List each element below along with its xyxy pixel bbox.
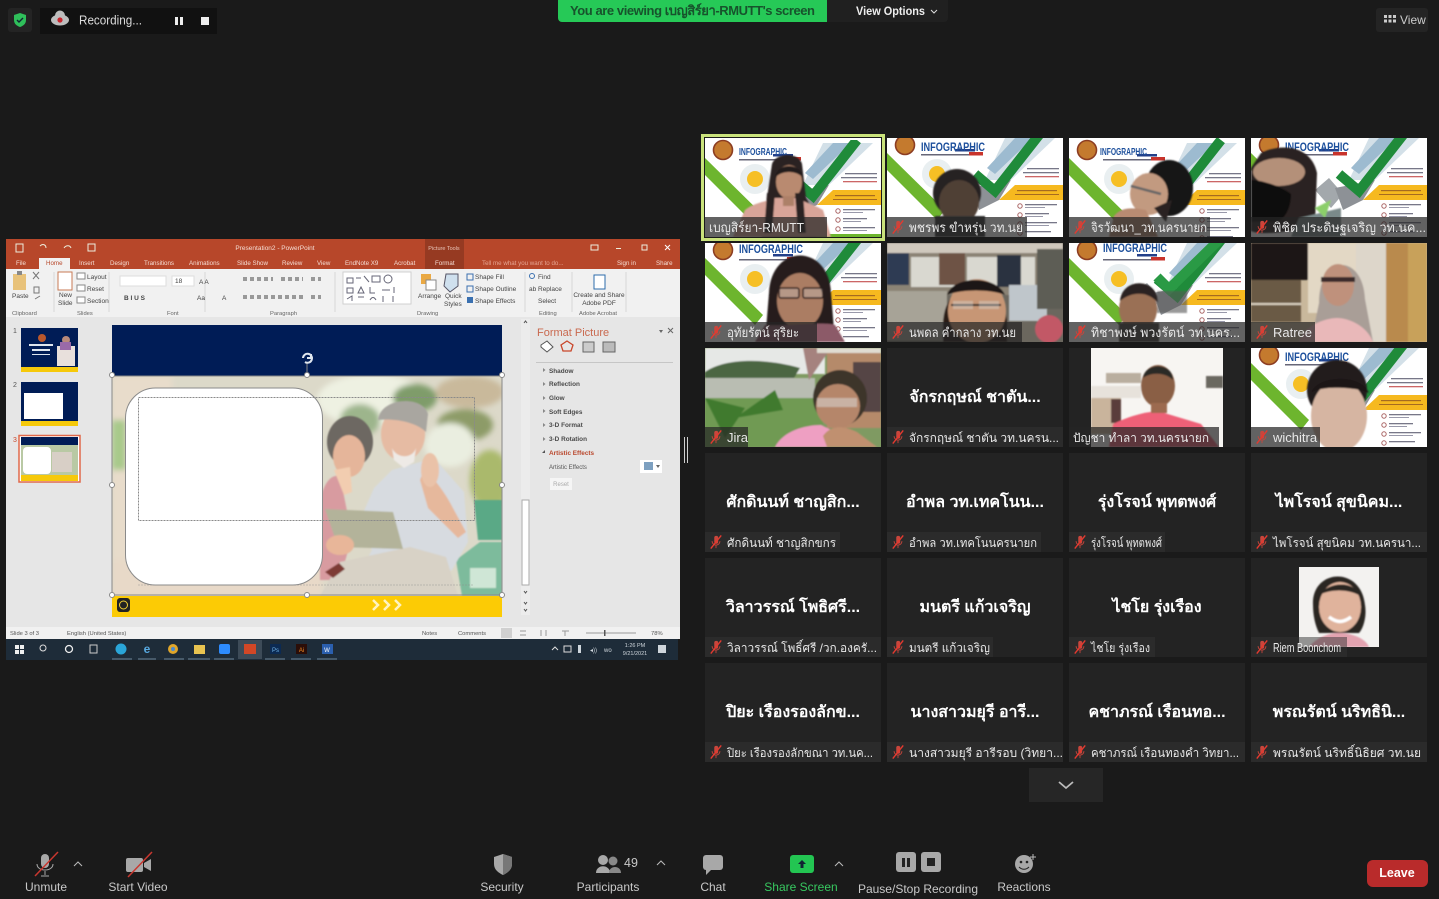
slide thumbnails: 3 — [13, 437, 17, 444]
ribbon: Shape Effects — [475, 298, 516, 305]
participant name labels: อุทัยรัตน์ สุริยะ — [727, 325, 799, 341]
participant tile: อุทัยรัตน์: INFOGRAPHIC — [739, 242, 803, 256]
name bar backgrounds — [705, 217, 1427, 762]
slide thumbnails: 2 — [13, 382, 17, 389]
participant tile: พชรพร — [887, 138, 1063, 237]
large participant names: ปิยะ เรืองรองลักข... — [725, 703, 860, 721]
PowerPoint title bar and tabs: Format — [435, 260, 455, 267]
windows taskbar: 1:26 PM — [625, 643, 646, 649]
large participant names: ศักดินนท์ ชาญสิก... — [726, 492, 860, 512]
participant name labels: ปิยะ เรืองรองลักขณา วท.นค... — [726, 746, 873, 760]
format picture pane: Reflection — [549, 381, 580, 388]
status bar: Comments — [458, 631, 486, 637]
format picture pane: 3-D Format — [549, 422, 584, 429]
shared PowerPoint window — [6, 239, 680, 660]
ribbon: Layout — [87, 274, 107, 281]
chat control: Chat — [700, 880, 726, 894]
selection handles — [110, 362, 504, 598]
participant name labels: จักรกฤษณ์ ชาตัน วท.นครน... — [909, 431, 1059, 445]
editing area background — [6, 317, 680, 627]
participants control: 49 — [624, 856, 638, 870]
PowerPoint title bar and tabs — [6, 239, 680, 269]
participant name labels: พรณรัตน์ นริทธิ์นิธิยศ วท.นย — [1273, 744, 1421, 760]
ribbon: Clipboard — [12, 311, 37, 317]
large participant names: มนตรี แก้วเจริญ — [920, 597, 1030, 617]
participant name labels: นางสาวมยุรี อารีรอบ (วิทยา... — [909, 746, 1063, 761]
security control — [480, 854, 524, 894]
participant tile: ทิชาพงษ์: INFOGRAPHIC — [1103, 241, 1167, 255]
participants control: Participants — [577, 880, 639, 894]
ribbon: Quick — [445, 293, 462, 300]
pause stop recording control — [858, 852, 978, 896]
ribbon: A A — [199, 279, 209, 286]
leave button: Leave — [1379, 866, 1415, 880]
ribbon: Font — [167, 311, 179, 317]
participant name labels: รุ่งโรจน์ พุทตพงศ์ — [1091, 536, 1162, 551]
PowerPoint title bar and tabs: Share — [656, 260, 673, 267]
ribbon: 18 — [175, 278, 183, 285]
vertical scroll bar — [521, 319, 530, 615]
participants control — [577, 855, 665, 894]
start video control — [108, 852, 168, 894]
large participant names: ไพโรจน์ สุขนิคม... — [1274, 491, 1402, 512]
unmute control: Unmute — [25, 880, 67, 894]
PowerPoint title bar and tabs: Transitions — [144, 260, 174, 267]
slide — [110, 325, 510, 617]
participant name labels: พชรพร ขำหรุ่น วท.นย — [909, 220, 1023, 236]
participant tile: Ratree — [1251, 243, 1427, 342]
format picture pane: Reset — [553, 482, 569, 488]
participant tile: นพดล — [887, 243, 1063, 342]
dashed text placeholder — [138, 398, 474, 585]
bottom toolbar — [25, 852, 1428, 896]
PowerPoint title bar and tabs: Review — [282, 260, 303, 267]
participant name labels: จิรวัฒนา_วท.นครนายก — [1091, 220, 1207, 235]
participant name labels: Ratree — [1273, 325, 1312, 340]
view button: View — [1400, 13, 1426, 27]
status bar: English (United States) — [67, 631, 126, 637]
ribbon: Shape Outline — [475, 286, 517, 293]
PowerPoint title bar and tabs: Tell me what you want to do... — [482, 260, 564, 267]
participant tile: speaker: INFOGRAPHIC — [739, 147, 787, 158]
rotate handle — [303, 354, 312, 363]
PowerPoint title bar and tabs: Picture Tools — [428, 246, 460, 252]
large participant names: คชาภรณ์ เรือนทอ... — [1088, 702, 1226, 721]
leave button — [1367, 860, 1428, 887]
ribbon: Adobe Acrobat — [579, 311, 617, 317]
screen share banner — [558, 0, 827, 22]
security control: Security — [480, 880, 524, 894]
ribbon: Aa — [197, 295, 205, 302]
reactions control — [997, 854, 1051, 894]
PowerPoint title bar and tabs: Animations — [189, 260, 220, 267]
large participant names — [725, 387, 1405, 722]
muted microphone icons — [711, 220, 1267, 759]
pause stop recording control: Pause/Stop Recording — [858, 882, 978, 896]
ribbon: Arrange — [418, 293, 442, 300]
ribbon: ab — [529, 286, 537, 293]
recording indicator: Recording... — [79, 12, 142, 28]
participant tile: speaker — [705, 138, 881, 237]
participant name labels: wichitra — [1272, 430, 1318, 445]
participant tile: พิชิต — [1251, 138, 1427, 237]
PowerPoint title bar and tabs: Design — [110, 260, 130, 267]
format picture pane: Soft Edges — [549, 409, 583, 416]
status bar — [6, 627, 680, 639]
ribbon: B I U S — [124, 295, 146, 302]
PowerPoint title bar and tabs: Sign in — [617, 260, 636, 267]
PowerPoint title bar and tabs: File — [16, 260, 27, 267]
participant tile: wichitra: INFOGRAPHIC — [1285, 350, 1349, 364]
ribbon: Adobe PDF — [582, 300, 616, 307]
participant name labels: ศักดินนท์ ชาญสิกขกร — [727, 536, 837, 550]
PowerPoint title bar and tabs: View — [317, 260, 331, 267]
ribbon: Editing — [539, 311, 557, 317]
slide thumbnails: 1 — [13, 328, 17, 335]
format picture pane: Artistic Effects — [549, 465, 587, 471]
ribbon: Section — [87, 298, 109, 305]
participant name labels: วิลาวรรณ์ โพธิ์ศรี /วก.องครั... — [727, 639, 877, 655]
participant tile: พชรพร: INFOGRAPHIC — [921, 140, 985, 154]
PowerPoint title bar and tabs: Insert — [79, 260, 95, 267]
ribbon: Reset — [87, 286, 104, 293]
status bar: Notes — [422, 631, 437, 637]
participant name labels: Riem Boonchom — [1273, 640, 1341, 655]
view options dropdown — [827, 0, 948, 22]
share screen control: Share Screen — [764, 880, 838, 894]
format picture pane: 3-D Rotation — [549, 436, 587, 443]
status bar: 78% — [651, 631, 663, 637]
participant name labels: พิชิต ประดิษฐเจริญ วท.นค... — [1273, 220, 1426, 236]
participant name labels: อำพล วท.เทคโนนครนายก — [909, 536, 1037, 550]
ribbon — [6, 269, 680, 317]
format picture pane: Format Picture — [537, 327, 609, 339]
PowerPoint title bar and tabs: Presentation2 - PowerPoint — [235, 245, 315, 252]
participant name labels: ไชโย รุ่งเรือง — [1090, 641, 1150, 656]
PowerPoint title bar and tabs: Slide Show — [237, 260, 268, 267]
participant tile: ทิชาพงษ์ — [1069, 241, 1245, 342]
slide navy header — [112, 325, 502, 376]
security shield badge — [8, 8, 32, 32]
participant name labels: ปัญชา ทำลา วท.นครนายก — [1073, 431, 1209, 445]
ribbon: Replace — [538, 286, 562, 293]
view options dropdown: View Options — [856, 4, 925, 18]
active speaker highlight — [702, 136, 884, 240]
avatar-off tile backgrounds — [705, 348, 1427, 762]
participant tile: wichitra — [1251, 348, 1427, 447]
ribbon: Slides — [77, 311, 93, 317]
windows taskbar: Ps — [272, 648, 279, 654]
chat control — [700, 855, 726, 894]
participant name labels: คชาภรณ์ เรือนทองคำ วิทยา... — [1091, 746, 1239, 760]
white rounded content box — [126, 388, 322, 585]
ribbon: A — [222, 295, 227, 302]
participant name labels: ทิชาพงษ์ พวงรัตน์ วท.นคร... — [1091, 325, 1240, 340]
reactions control: Reactions — [997, 880, 1051, 894]
ribbon: Create and Share — [573, 292, 625, 299]
start video control: Start Video — [108, 880, 168, 894]
participant name labels: Jira — [727, 430, 749, 445]
unmute control — [25, 852, 82, 894]
format picture pane: Shadow — [549, 368, 574, 375]
participant tile: จิรวัฒนา: INFOGRAPHIC — [1100, 147, 1147, 158]
format picture pane — [536, 327, 673, 490]
status bar: Slide 3 of 3 — [10, 631, 39, 637]
large participant names: รุ่งโรจน์ พุทตพงศ์ — [1098, 491, 1217, 512]
share screen control — [764, 855, 843, 894]
couple photo — [112, 376, 502, 596]
windows taskbar: 9/21/2021 — [623, 651, 647, 657]
panel splitter — [684, 437, 688, 463]
format picture pane: Glow — [549, 395, 565, 402]
large participant names: วิลาวรรณ์ โพธิศรี... — [725, 596, 860, 616]
participant name labels: ไพโรจน์ สุขนิคม วท.นครนา... — [1272, 536, 1421, 551]
slide yellow footer — [112, 596, 502, 617]
view button — [1376, 8, 1428, 32]
participant tile: จิรวัฒนา — [1069, 138, 1245, 237]
ribbon: Slide — [58, 300, 73, 307]
screen share banner: You are viewing เบญสิร์ยา-RMUTT's screen — [570, 3, 815, 19]
ribbon: Drawing — [417, 311, 438, 317]
windows taskbar: e — [144, 642, 151, 656]
large participant names: อำพล วท.เทคโนน... — [906, 491, 1044, 511]
large participant names: พรณรัตน์ นริทธินิ... — [1273, 702, 1405, 721]
format picture pane: Artistic Effects — [549, 450, 595, 457]
participant tile: Riem Boonchom — [1299, 567, 1379, 647]
ribbon: Styles — [444, 301, 462, 308]
next page chevron button — [1029, 768, 1103, 802]
ribbon: Select — [538, 298, 556, 305]
PowerPoint title bar and tabs: EndNote X9 — [345, 260, 379, 267]
large participant names: นางสาวมยุรี อารี... — [911, 702, 1039, 722]
recording indicator — [40, 8, 217, 34]
participant tile: Jira — [705, 348, 881, 447]
participant name labels: นพดล คำกลาง วท.นย — [909, 325, 1016, 340]
participant name labels: มนตรี แก้วเจริญ — [909, 641, 990, 655]
PowerPoint title bar and tabs: Acrobat — [394, 260, 416, 267]
ribbon: Shape Fill — [475, 274, 504, 281]
ribbon: Paste — [12, 293, 29, 300]
participant tile: พิชิต: INFOGRAPHIC — [1285, 140, 1349, 154]
participant name labels — [709, 220, 1426, 761]
participant tile: อุทัยรัตน์ — [705, 242, 881, 342]
windows taskbar: Ai — [299, 648, 304, 654]
large participant names: ไชโย รุ่งเรือง — [1110, 596, 1202, 617]
PowerPoint title bar and tabs: Home — [46, 260, 63, 267]
ribbon: Find — [538, 274, 551, 281]
ribbon: New — [59, 292, 72, 299]
slide thumbnails — [13, 328, 80, 482]
participant tile: ปัญชา photo — [1091, 348, 1223, 447]
windows taskbar: ◂)) — [590, 648, 597, 654]
large participant names: จักรกฤษณ์ ชาตัน... — [909, 387, 1041, 406]
participant name labels: เบญสิร์ยา-RMUTT — [709, 220, 804, 235]
windows taskbar: wo — [603, 648, 612, 654]
windows taskbar — [6, 639, 678, 660]
ribbon: Paragraph — [270, 311, 297, 317]
windows taskbar: W — [324, 648, 330, 654]
